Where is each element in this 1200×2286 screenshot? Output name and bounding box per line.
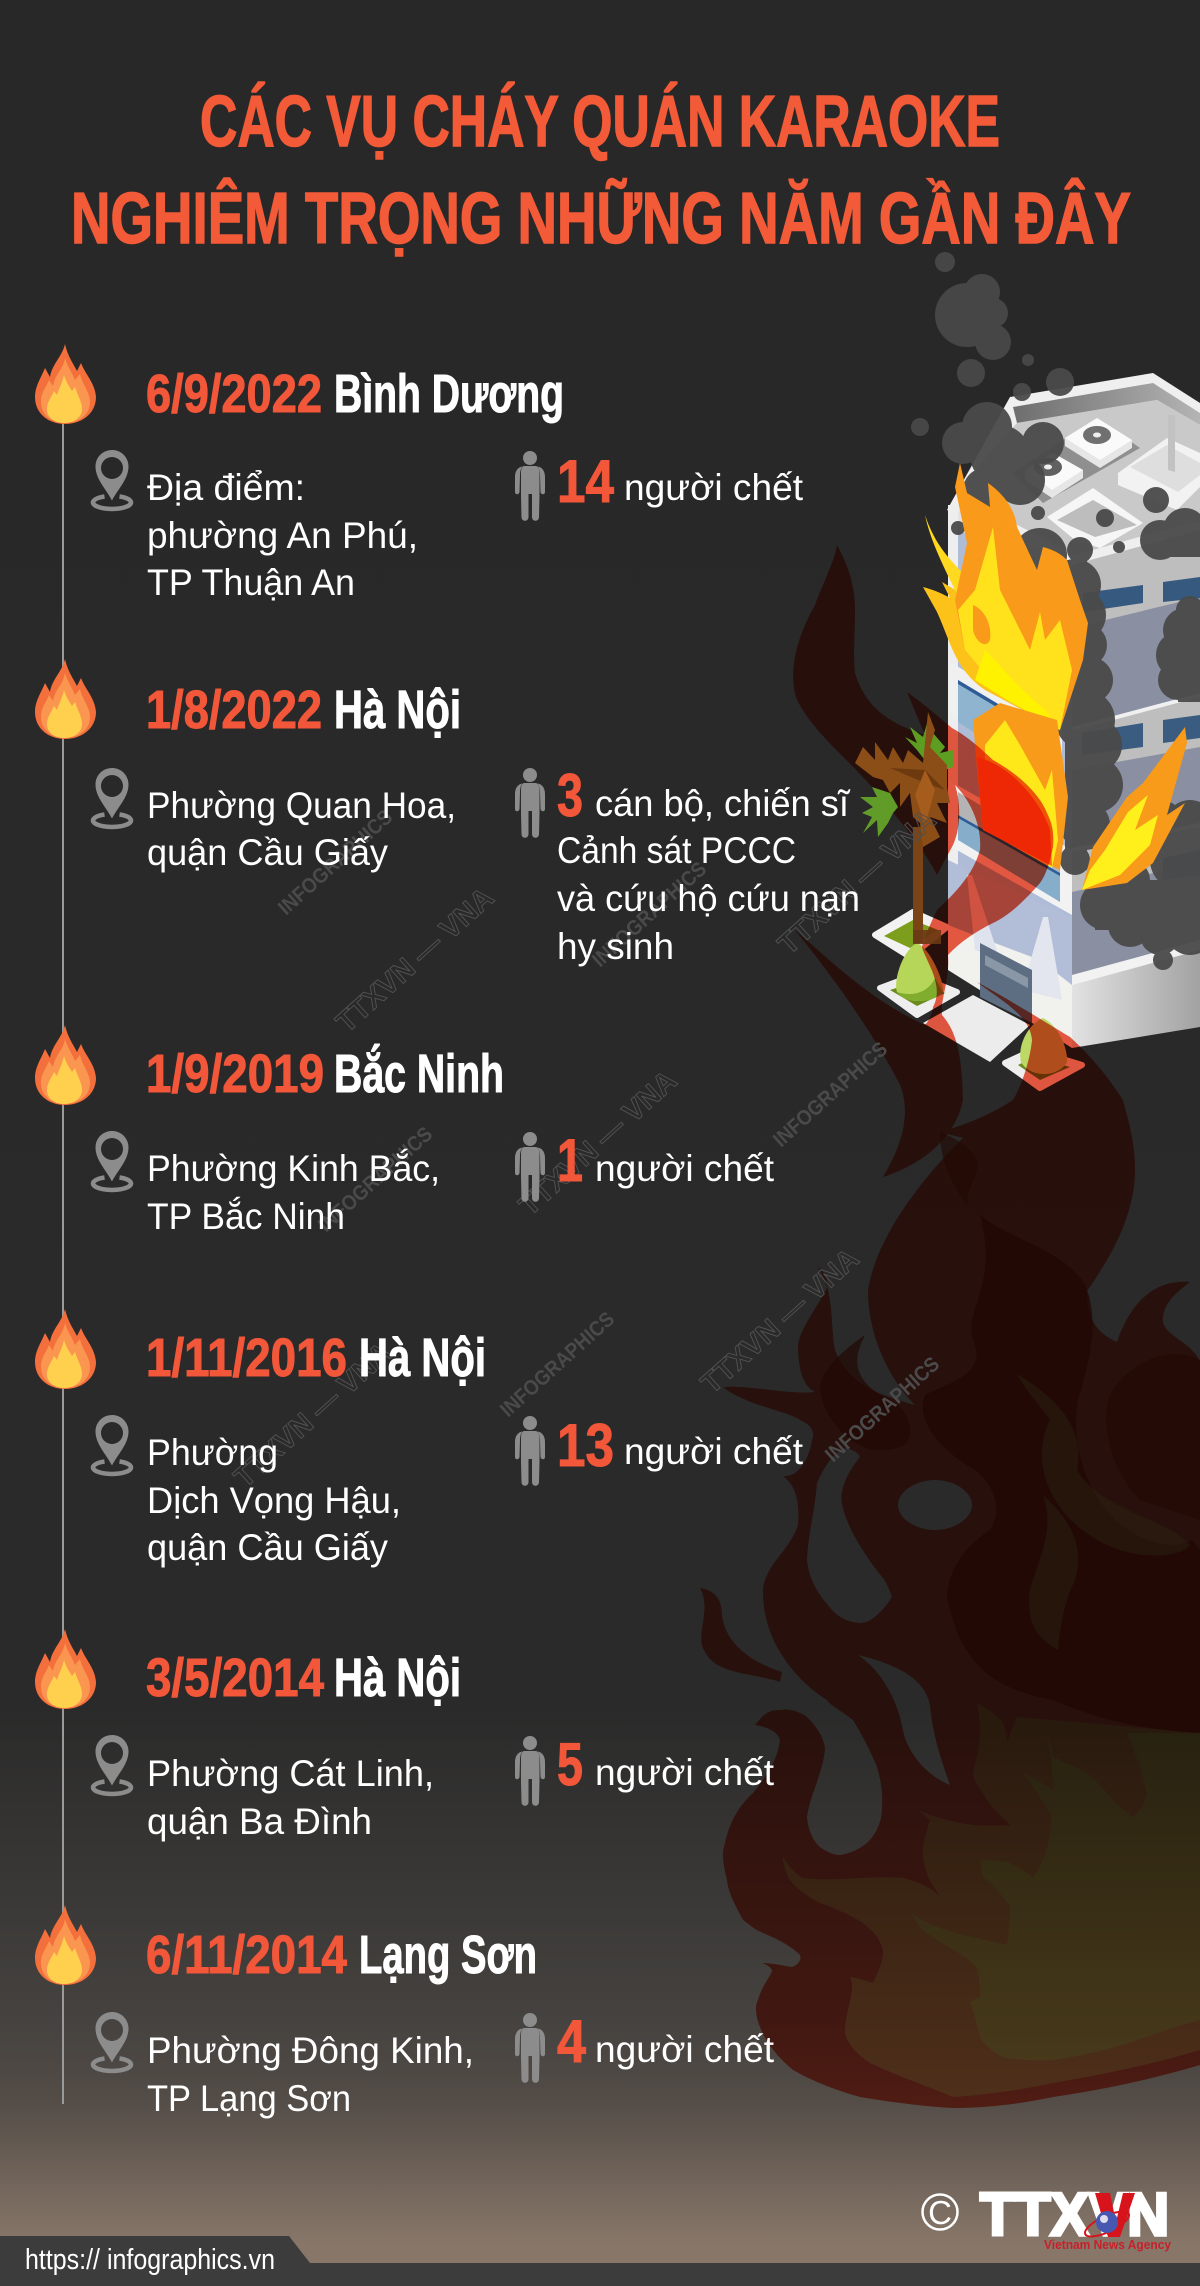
ledges and walls <box>948 505 1200 587</box>
address: Dịch Vọng Hậu, <box>147 1480 401 1521</box>
smoke over the building <box>942 368 1200 970</box>
address: phường An Phú, <box>147 515 418 556</box>
icon: person <box>515 768 545 838</box>
heading <box>146 1044 504 1104</box>
background flame silhouette <box>700 545 1200 2108</box>
casualties: người chết <box>595 1148 775 1189</box>
casualties: Cảnh sát PCCC <box>557 830 796 871</box>
heading <box>146 1925 537 1985</box>
casualties: người chết <box>624 1431 804 1472</box>
event: 6/11/2014 Lạng Sơn <box>35 1905 775 2119</box>
window row two <box>948 780 1072 915</box>
tagline: Vietnam News Agency <box>1044 2237 1172 2252</box>
casualties <box>557 448 804 515</box>
casualties: 4 <box>557 2008 587 2075</box>
event: 3/5/2014 Hà Nội <box>35 1629 775 1842</box>
title <box>71 82 1131 259</box>
casualties: người chết <box>624 467 804 508</box>
heading <box>146 364 564 424</box>
casualties: và cứu hộ cứu nạn <box>557 878 860 919</box>
address: Phường Quan Hoa, <box>147 785 456 826</box>
heading <box>146 680 461 740</box>
copyright mark <box>922 2194 958 2231</box>
watermarks: INFOGRAPHICS <box>821 1353 944 1467</box>
rooftop fan units <box>1065 418 1132 468</box>
address <box>147 1148 440 1237</box>
address: quận Ba Đình <box>147 1801 372 1842</box>
palm tree <box>855 712 953 944</box>
address: Phường Kinh Bắc, <box>147 1148 440 1189</box>
heading: 3/5/2014 <box>146 1648 324 1708</box>
icon: location pin <box>93 1415 131 1474</box>
watermarks: TTXVN — VNA <box>695 1243 865 1400</box>
casualties <box>557 762 860 967</box>
event: 1/8/2022 Hà Nội <box>35 659 860 967</box>
address: Địa điểm: <box>147 467 305 508</box>
address: quận Cầu Giấy <box>147 832 388 873</box>
small side flame <box>700 1588 782 1682</box>
watermarks: INFOGRAPHICS <box>274 806 397 920</box>
heading: 1/9/2019 <box>146 1044 324 1104</box>
watermarks: INFOGRAPHICS <box>496 1308 619 1422</box>
watermarks: INFOGRAPHICS <box>588 858 711 972</box>
icon: flame <box>35 659 96 739</box>
heading: Hà Nội <box>334 680 461 740</box>
watermarks: INFOGRAPHICS <box>314 1123 437 1237</box>
casualties <box>557 1412 804 1479</box>
address <box>147 2030 474 2119</box>
watermarks: TTXVN — VNA <box>513 1065 683 1222</box>
watermarks: TTXVN — VNA <box>330 882 500 1039</box>
icon: flame <box>35 1309 96 1389</box>
casualties <box>557 2008 775 2075</box>
icon: flame <box>35 1905 96 1985</box>
event: 1/11/2016 Hà Nội <box>35 1309 804 1568</box>
lower flame <box>973 703 1068 870</box>
casualties: 3 <box>557 762 583 829</box>
icon: person <box>515 451 545 521</box>
timeline line <box>62 420 64 2104</box>
icon: location pin <box>93 2012 131 2071</box>
entrance door <box>980 943 1032 1023</box>
planters and bushes <box>875 912 1082 1088</box>
address: quận Cầu Giấy <box>147 1527 388 1568</box>
heading: Hà Nội <box>359 1328 486 1388</box>
heading: Hà Nội <box>334 1648 461 1708</box>
footer bar <box>0 2236 1200 2286</box>
casualties: 5 <box>557 1731 583 1798</box>
address <box>147 785 456 873</box>
heading: Bắc Ninh <box>334 1044 504 1104</box>
window row one <box>950 662 1062 792</box>
watermarks: INFOGRAPHICS <box>769 1038 892 1152</box>
ground floor <box>948 860 1072 985</box>
address: Phường Đông Kinh, <box>147 2030 474 2071</box>
address: TP Lạng Sơn <box>147 2078 351 2119</box>
heading: 1/11/2016 <box>146 1328 347 1388</box>
icon: location pin <box>93 450 131 509</box>
casualties: cán bộ, chiến sĩ <box>595 783 851 824</box>
address: TP Thuận An <box>147 562 355 603</box>
icon: flame <box>35 1629 96 1709</box>
icon: person <box>515 1736 545 1806</box>
illustration: burning building <box>875 252 1200 1088</box>
right flame <box>1082 727 1187 890</box>
heading: 6/11/2014 <box>146 1925 347 1985</box>
smoke above the roof <box>911 252 1034 436</box>
casualties: người chết <box>595 2029 775 2070</box>
heading: 6/9/2022 <box>146 364 322 424</box>
icon: location pin <box>93 1735 131 1794</box>
icon: location pin <box>93 768 131 827</box>
casualties: 1 <box>557 1127 583 1194</box>
entrance mat <box>923 995 1030 1062</box>
address <box>147 467 418 603</box>
logo: TTXVN <box>922 2181 1172 2252</box>
heading <box>146 1648 461 1708</box>
casualties: hy sinh <box>557 926 674 967</box>
address <box>147 1753 434 1842</box>
casualties <box>557 1731 775 1798</box>
casualties: người chết <box>595 1752 775 1793</box>
casualties: 14 <box>557 448 615 515</box>
heading: Lạng Sơn <box>359 1925 537 1985</box>
watermarks: TTXVN — VNA <box>228 1337 398 1494</box>
heading <box>146 1328 486 1388</box>
icon: person <box>515 1132 545 1202</box>
icon: person <box>515 2013 545 2083</box>
event: 1/9/2019 Bắc Ninh <box>35 1025 775 1237</box>
address: Phường Cát Linh, <box>147 1753 434 1794</box>
inner flame layers <box>783 1132 1200 2097</box>
icon: flame <box>35 344 96 424</box>
watermarks: TTXVN — VNA <box>772 804 942 961</box>
watermarks <box>228 804 944 1494</box>
copyright mark: C <box>928 2194 952 2231</box>
address: TP Bắc Ninh <box>147 1196 345 1237</box>
heading: Bình Dương <box>334 364 564 424</box>
casualties <box>557 1127 775 1194</box>
website url: https:// infographics.vn <box>25 2244 275 2276</box>
event: 6/9/2022 Bình Dương <box>35 344 804 603</box>
icon: person <box>515 1416 545 1486</box>
casualties: 13 <box>557 1412 614 1479</box>
heading: 1/8/2022 <box>146 680 322 740</box>
icon: flame <box>35 1025 96 1105</box>
icon: location pin <box>93 1131 131 1190</box>
address <box>147 1432 401 1568</box>
address: Phường <box>147 1432 278 1473</box>
wordmark: TTXVN <box>980 2181 1169 2248</box>
building body <box>923 373 1200 1062</box>
main yellow flame <box>923 463 1088 730</box>
rooftop plates and vents <box>1013 418 1140 503</box>
